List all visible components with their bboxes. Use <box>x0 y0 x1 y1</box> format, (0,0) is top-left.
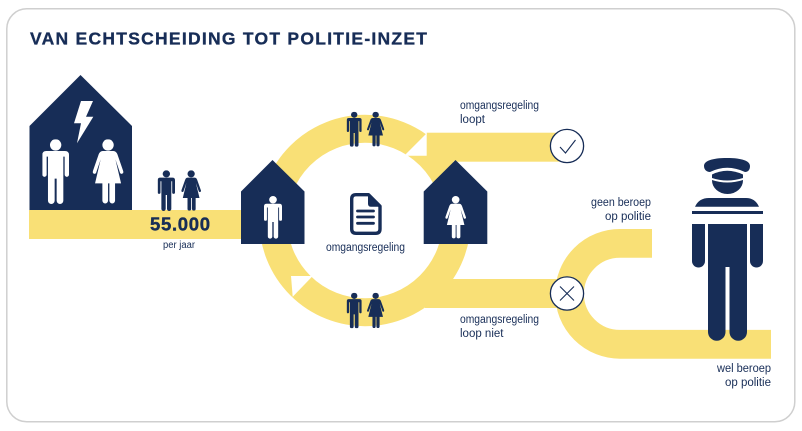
title: VAN ECHTSCHEIDING TOT POLITIE-INZET <box>30 28 427 48</box>
arms <box>692 224 705 268</box>
section: custody cycle <box>241 112 567 328</box>
label: per jaar: per jaar <box>163 240 196 251</box>
label: omgangsregeling loop niet: loop niet <box>460 328 504 340</box>
label: omgangsregeling loopt: omgangsregeling <box>460 100 539 112</box>
icon: children bottom <box>347 293 384 328</box>
yellow ring <box>273 129 457 312</box>
shoulders <box>695 198 759 207</box>
icon: document <box>352 195 380 233</box>
arrow gap: top right <box>406 133 427 156</box>
yellow bar: arrangement fails <box>425 279 567 308</box>
icon: father's house <box>241 160 304 244</box>
label: geen beroep op politie: op politie <box>605 211 651 223</box>
icon: cross circle <box>550 277 584 310</box>
label: omgangsregeling loopt: loopt <box>460 114 486 126</box>
label: wel beroep op politie: op politie <box>725 377 771 389</box>
chest band <box>692 211 763 214</box>
icon: lightning bolt <box>74 101 93 143</box>
number: 55.000: 55.000 <box>150 214 210 235</box>
yellow U-shaped path <box>570 243 771 344</box>
icon: children <box>158 170 201 211</box>
torso and legs <box>708 224 747 341</box>
icon: police officer <box>692 158 763 341</box>
icon: father <box>42 139 69 204</box>
label: wel beroep op politie: wel beroep <box>716 363 771 375</box>
icon: children top <box>347 112 384 147</box>
label: omgangsregeling: omgangsregeling <box>326 242 405 254</box>
label: omgangsregeling loop niet: omgangsregeling <box>460 314 539 326</box>
icon: mother <box>93 139 123 203</box>
yellow bar: arrangement works <box>427 133 567 162</box>
icon: house with conflict <box>30 75 132 210</box>
arrow gap: bottom left <box>291 276 313 297</box>
label: geen beroep op politie: geen beroep <box>591 197 651 209</box>
head <box>712 180 743 194</box>
cap <box>704 158 750 172</box>
visor <box>712 171 743 180</box>
icon: check circle <box>550 129 584 163</box>
yellow bar: into circle <box>29 210 243 239</box>
section: divorce house and flow bar <box>29 75 243 251</box>
icon: mother's house <box>424 160 487 244</box>
